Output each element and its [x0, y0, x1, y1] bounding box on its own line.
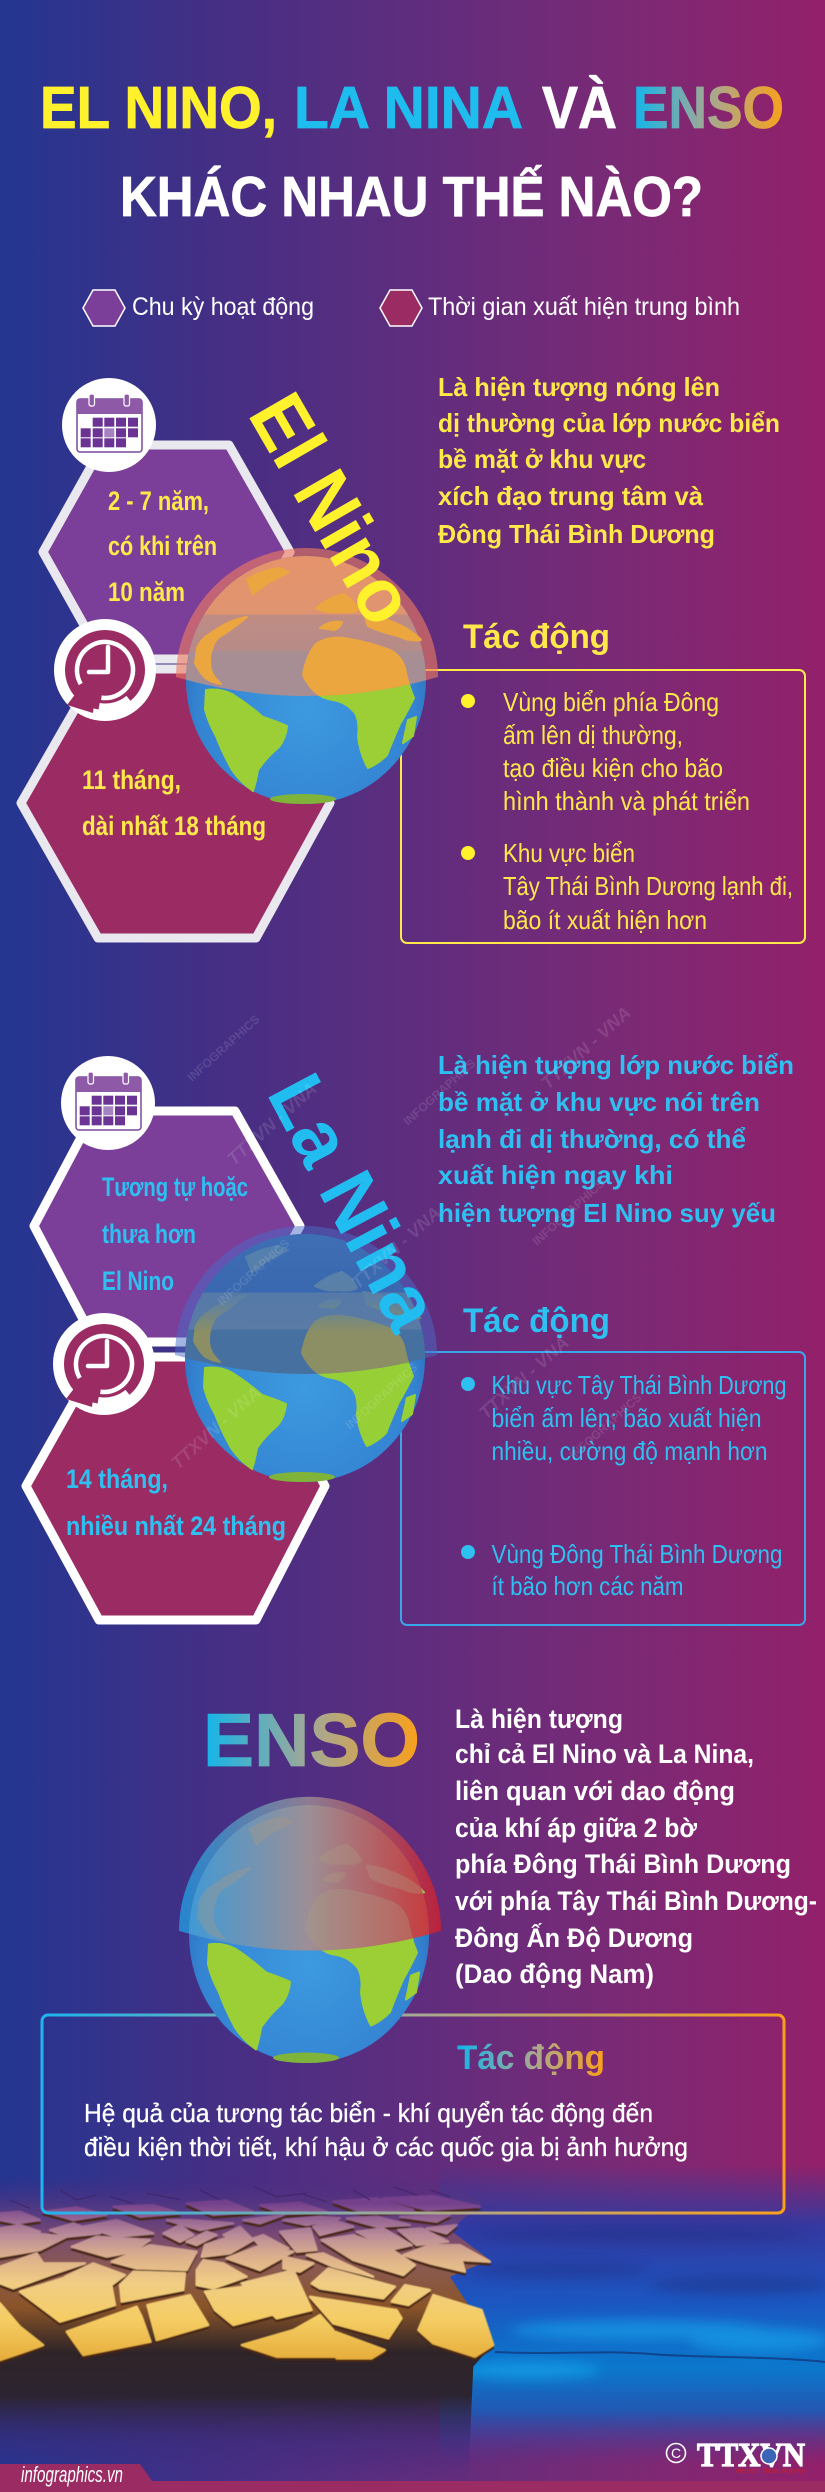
La Nina cycle text: [102, 1172, 248, 1296]
ENSO description: Đông Ấn Độ Dương: [455, 1922, 693, 1953]
La Nina description: Là hiện tượng lớp nước biển: [438, 1050, 794, 1080]
El Nino description: xích đạo trung tâm và: [438, 481, 704, 511]
ENSO impact box: [42, 2015, 784, 2213]
title: VÀ: [542, 75, 617, 141]
ENSO impact heading: Tác động: [457, 2039, 605, 2077]
bullet two: Khu vực biển: [503, 838, 635, 868]
El Nino description: Đông Thái Bình Dương: [438, 519, 715, 549]
El Nino rotated heading: El Nino: [232, 378, 433, 639]
watermarks: TTXVN - VNA: [537, 1002, 635, 1093]
cracked earth: [0, 2177, 493, 2480]
website credit: infographics.vn: [21, 2462, 123, 2487]
watermarks: TTXVN - VNA: [347, 1202, 445, 1293]
La Nina impact box: [401, 1352, 805, 1625]
watermarks: INFOGRAPHICS: [567, 1390, 644, 1462]
El Nino cycle text: 10 năm: [108, 577, 185, 607]
La Nina description: bề mặt ở khu vực nói trên: [438, 1087, 760, 1117]
La Nina duration text: [66, 1464, 286, 1541]
agency logo: TTXVN: [697, 2437, 805, 2474]
bullet one: hình thành và phát triển: [503, 786, 750, 816]
bullet one: tạo điều kiện cho bão: [503, 753, 723, 783]
bullet two: [461, 838, 793, 935]
El Nino impact box: [401, 670, 805, 943]
El Nino cycle text: có khi trên: [108, 531, 217, 561]
La Nina globe with cool dome: [175, 1226, 437, 1482]
photo: cracked earth and water: [0, 2165, 825, 2480]
title: ENSO: [633, 75, 784, 141]
legend item: average duration: [380, 290, 740, 326]
La Nina cycle hexagon: [34, 1111, 300, 1342]
bullet two: [461, 1539, 782, 1601]
watermarks: INFOGRAPHICS: [343, 1360, 420, 1432]
La Nina rotated heading: La Nina: [251, 1060, 458, 1344]
ENSO heading: ENSO: [203, 1698, 420, 1782]
ENSO impact text: điều kiện thời tiết, khí hậu ở các quốc gia bị ảnh hưởng: [84, 2132, 688, 2162]
ENSO description: phía Đông Thái Bình Dương: [455, 1849, 791, 1879]
ENSO impact text: Hệ quả của tương tác biển - khí quyển tác động đến: [84, 2098, 653, 2128]
watermarks: TTXVN - VNA: [167, 1382, 265, 1473]
El Nino impact heading: Tác động: [463, 618, 610, 656]
bullet one: nhiều, cường độ mạnh hơn: [492, 1436, 768, 1466]
La Nina cycle text: thưa hơn: [102, 1219, 196, 1249]
El Nino description: dị thường của lớp nước biển: [438, 408, 780, 438]
La Nina duration text: nhiều nhất 24 tháng: [66, 1511, 286, 1541]
El Nino cycle text: [108, 486, 217, 607]
El Nino cycle text: 2 - 7 năm,: [108, 486, 209, 516]
bullet two: Vùng Đông Thái Bình Dương: [492, 1539, 782, 1569]
watermarks: INFOGRAPHICS: [530, 1176, 607, 1248]
bullet one: [461, 1370, 786, 1466]
ENSO description: [455, 1704, 817, 1989]
watermarks: TTXVN - VNA: [475, 1332, 573, 1423]
La Nina description: [438, 1050, 794, 1228]
bullet one: [461, 687, 750, 816]
watermarks: TTXVN - VNA: [223, 1078, 321, 1169]
La Nina duration hexagon: [26, 1357, 325, 1620]
watermarks: INFOGRAPHICS: [185, 1012, 262, 1084]
La Nina duration text: 14 tháng,: [66, 1464, 168, 1494]
El Nino cycle hexagon: [43, 445, 290, 659]
La Nina cycle text: Tương tự hoặc: [102, 1172, 248, 1202]
La Nina cycle text: El Nino: [102, 1266, 174, 1296]
ENSO description: (Dao động Nam): [455, 1959, 654, 1989]
bullet one: biển ấm lên; bão xuất hiện: [492, 1403, 762, 1433]
La Nina impact heading: Tác động: [463, 1302, 610, 1340]
watermarks: INFOGRAPHICS: [215, 1236, 292, 1308]
El Nino description: [438, 372, 780, 549]
panel: ENSO: [42, 1698, 817, 2213]
agency logo: C: [671, 2445, 681, 2461]
title: EL NINO,: [40, 75, 277, 141]
legend: [83, 290, 740, 326]
watermarks: [167, 1002, 644, 1473]
La Nina description: hiện tượng El Nino suy yếu: [438, 1198, 776, 1228]
El Nino description: Là hiện tượng nóng lên: [438, 372, 720, 402]
ENSO impact text: [84, 2098, 688, 2162]
panel: El Nino: [21, 372, 805, 943]
bullet one: ấm lên dị thường,: [503, 720, 683, 750]
icon: clock: [54, 619, 156, 721]
icon: calendar: [61, 1056, 155, 1150]
ENSO description: của khí áp giữa 2 bờ: [455, 1813, 698, 1843]
title: [40, 75, 784, 229]
ENSO description: Là hiện tượng: [455, 1704, 623, 1734]
watermarks: INFOGRAPHICS: [401, 1056, 478, 1128]
ENSO description: liên quan với dao động: [455, 1776, 735, 1806]
agency logo: Vietnam News Agency: [735, 2468, 805, 2475]
bullet two: bão ít xuất hiện hơn: [503, 905, 707, 935]
legend item: cycle: [83, 290, 314, 326]
El Nino duration hexagon: [21, 669, 330, 938]
bullet two: ít bão hơn các năm: [492, 1571, 684, 1601]
La Nina description: lạnh đi dị thường, có thể: [438, 1124, 746, 1154]
legend item: cycle: Chu kỳ hoạt động: [132, 293, 314, 321]
panel: La Nina: [26, 1002, 805, 1625]
title: KHÁC NHAU THẾ NÀO?: [120, 164, 703, 229]
El Nino duration text: 11 tháng,: [82, 765, 181, 795]
El Nino description: bề mặt ở khu vực: [438, 444, 646, 474]
bullet one: Vùng biển phía Đông: [503, 687, 719, 717]
icon: calendar: [62, 378, 156, 472]
icon: clock: [53, 1313, 155, 1415]
La Nina description: xuất hiện ngay khi: [438, 1160, 673, 1190]
ENSO description: chỉ cả El Nino và La Nina,: [455, 1739, 754, 1769]
footer bar and website tab: [0, 2462, 825, 2492]
El Nino duration text: dài nhất 18 tháng: [82, 811, 266, 841]
legend item: average duration: Thời gian xuất hiện trung bình: [428, 293, 740, 321]
El Nino duration text: [82, 765, 266, 841]
ENSO globe with mixed dome: [179, 1797, 441, 2063]
title: LA NINA: [294, 75, 523, 141]
water surface: [440, 2165, 825, 2465]
El Nino globe with warm dome: [176, 548, 438, 804]
